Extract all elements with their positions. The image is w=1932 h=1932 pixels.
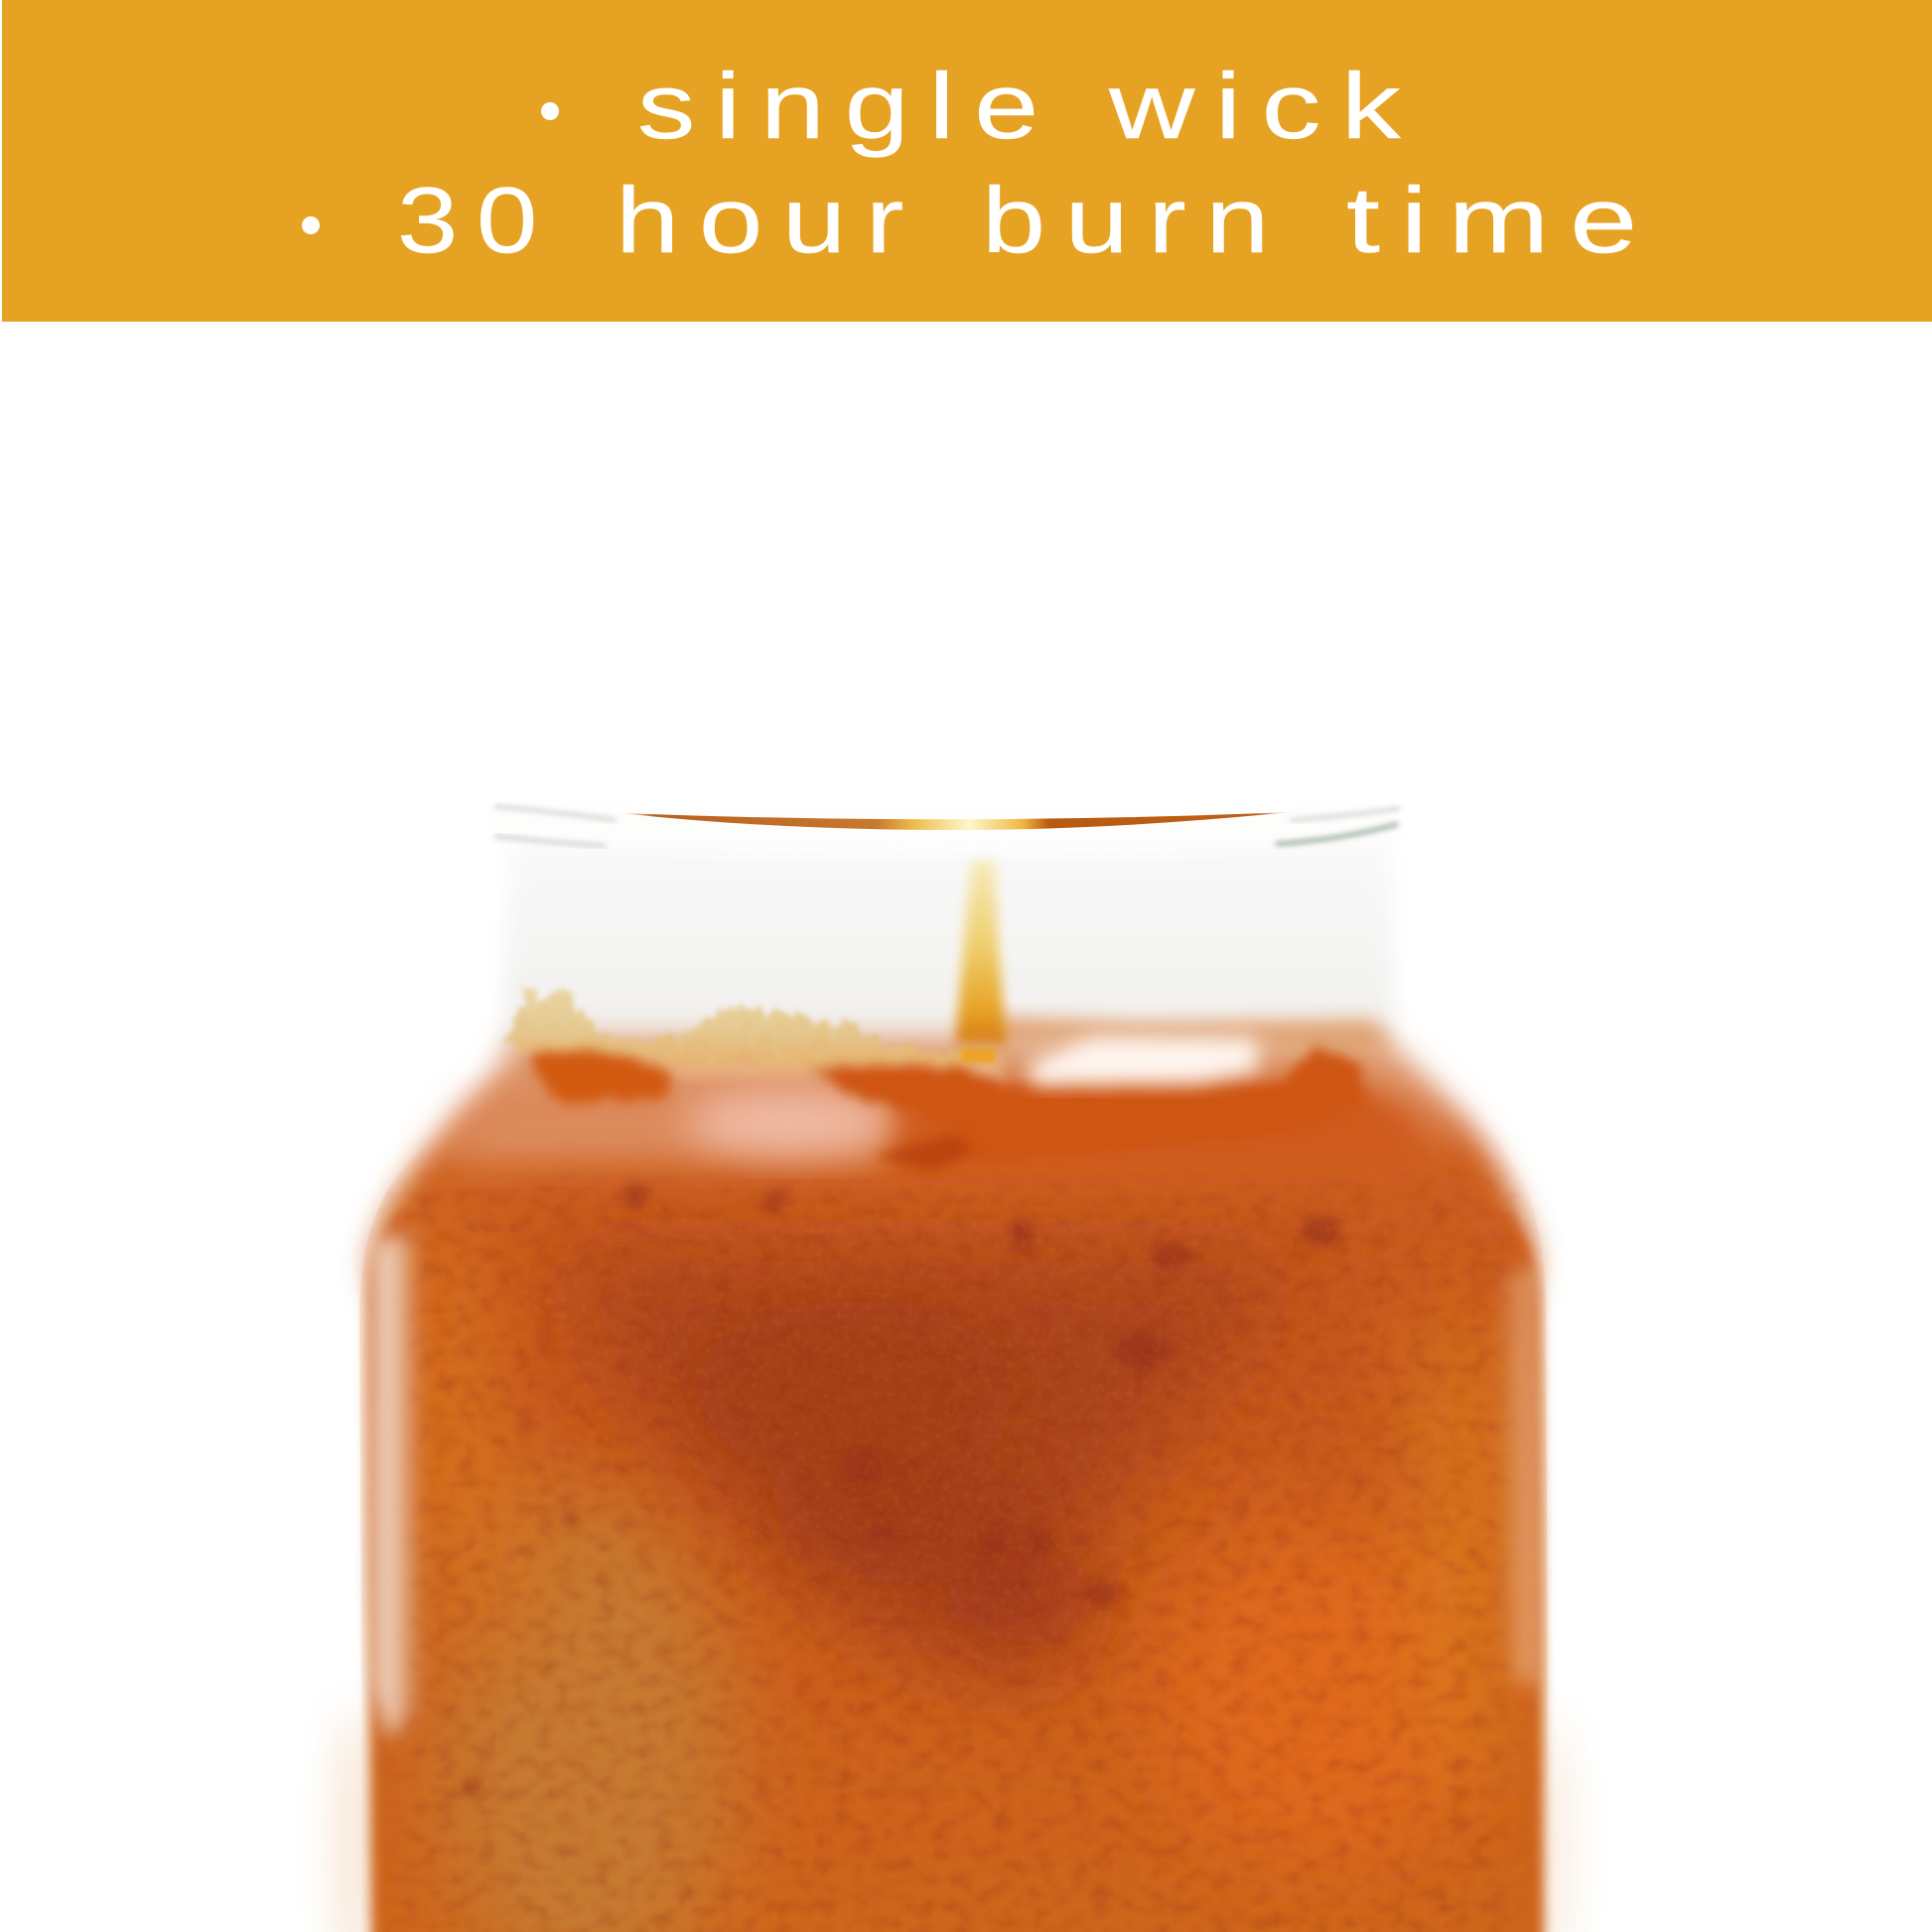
mottled wax texture [389,1187,1519,1932]
glass rim [492,802,1401,854]
feature line: 30 hour burn time [302,168,1658,272]
wax body [363,1037,1549,1932]
feature line: single wick: single [637,54,1058,158]
shoulder wax band [437,1082,1430,1172]
jar outer glow at base [338,1708,1567,1932]
feature line: 30 hour burn time: 30 [397,168,556,272]
melted orange pool left [532,1051,670,1103]
melted orange pool centre [809,1048,1362,1162]
candle jar [338,802,1567,1932]
pale wax surface fringe [510,978,1388,1077]
glass neck [501,829,1396,1052]
header band [2,0,1932,322]
shoulder silhouette [372,1037,1534,1291]
feature line: single wick: wick [1108,54,1421,158]
feature line: 30 hour burn time: time [1346,168,1658,272]
feature line: single wick [541,54,1421,158]
white reflection on wax [1028,1037,1259,1084]
feature line: 30 hour burn time: burn [982,168,1289,272]
wick [955,860,1007,1062]
warm base patches [407,1191,1504,1932]
dark blotches [464,1182,1340,1797]
feature line: 30 hour burn time: hour [616,168,923,272]
glass side highlights [371,1231,1541,1737]
dark central stain [556,1261,1291,1688]
lower jar silhouette [367,1211,1545,1932]
